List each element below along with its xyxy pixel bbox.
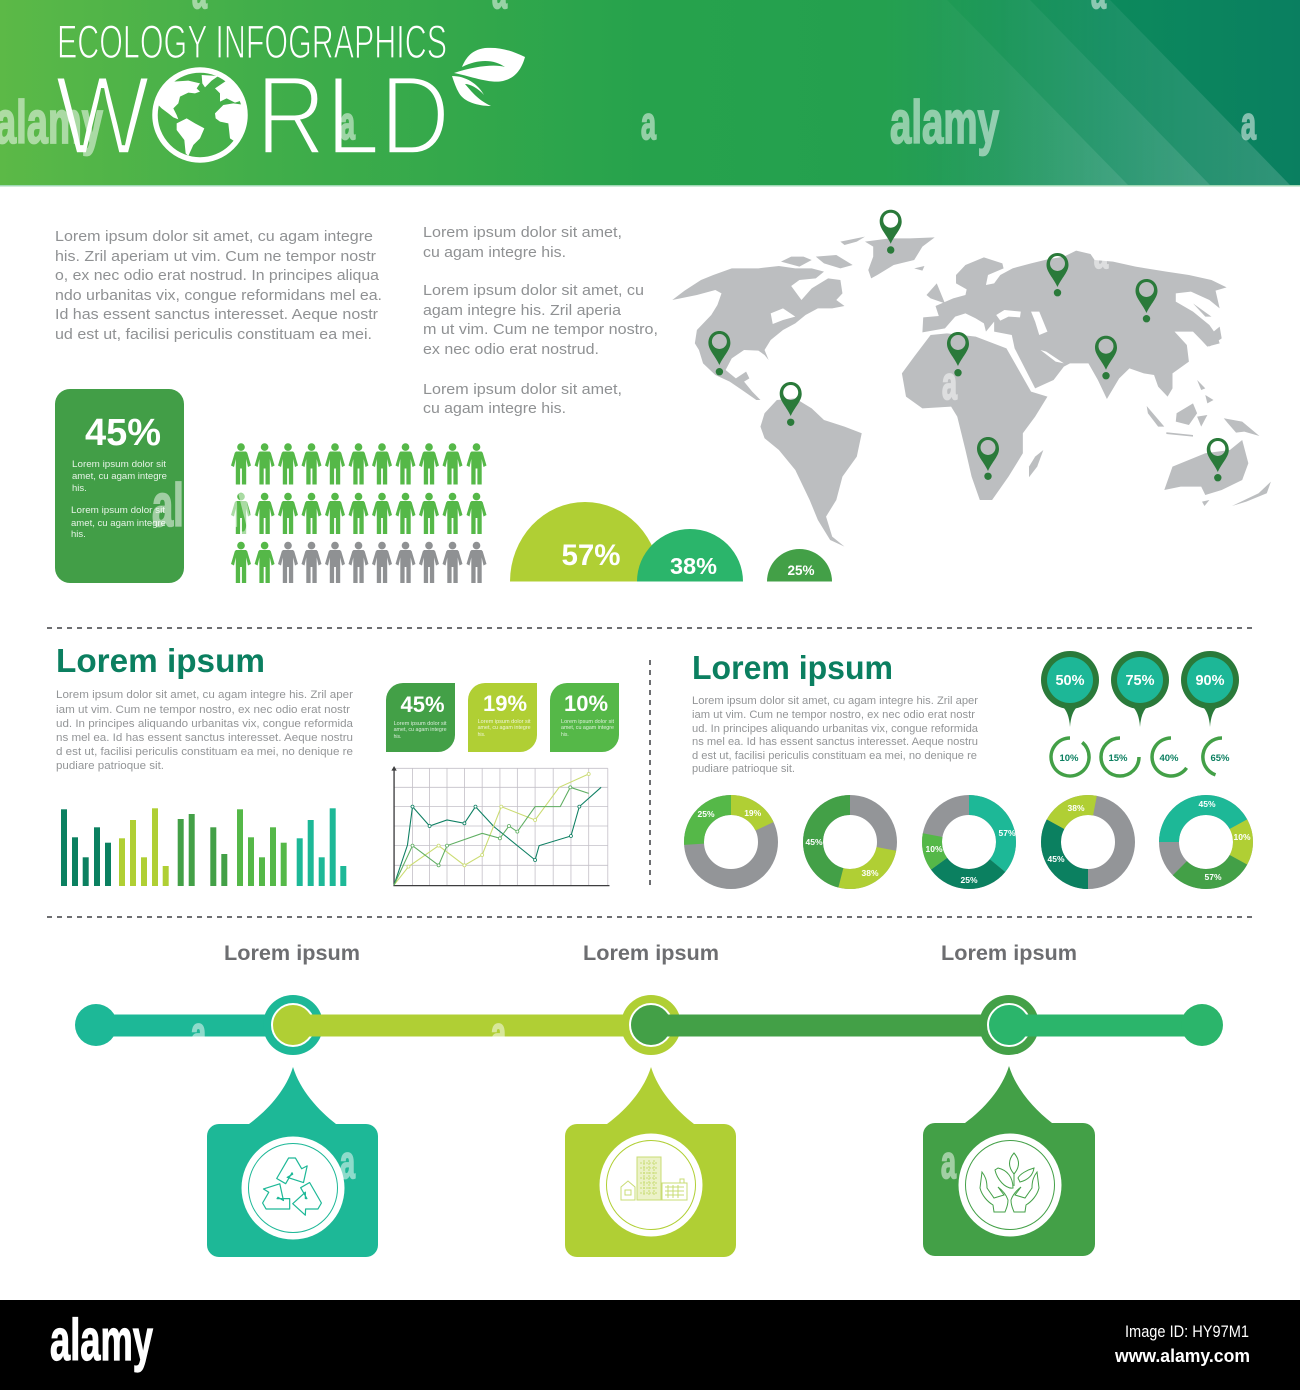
text block: intro left: Lorem ipsum dolor sit amet, cu agam integre bbox=[55, 229, 373, 245]
text block: paragraph right: pudiare patrioque sit. bbox=[692, 763, 795, 775]
stat tab 19%: his. bbox=[478, 732, 485, 738]
icon: hands and leaves bbox=[980, 1153, 1039, 1212]
icon: leaves bbox=[452, 48, 525, 106]
chart: people pictogram bbox=[231, 443, 486, 583]
icon: map pin north africa bbox=[947, 332, 969, 376]
panel: recycle card bbox=[207, 1067, 378, 1257]
footer bar: alamy bbox=[50, 1308, 153, 1373]
watermark overlays: a bbox=[641, 97, 656, 149]
donut chart 3 bbox=[925, 805, 1016, 885]
stat tab 19%: 19% bbox=[483, 691, 527, 716]
timeline heading 1: Lorem ipsum bbox=[224, 941, 360, 965]
semicircle 25%: 25% bbox=[787, 563, 815, 578]
semicircle 25% bbox=[767, 549, 832, 582]
panel: 45% stat card: Lorem ipsum dolor sit bbox=[71, 505, 165, 516]
text block: paragraph left: ns mel ea. Id has essent sanctus interesset. Aeque nostru bbox=[56, 732, 353, 744]
icon: buildings bbox=[621, 1157, 687, 1200]
panel: 45% stat card: his. bbox=[72, 483, 87, 494]
callout pin 50%: 50% bbox=[1055, 673, 1085, 689]
chart: line chart bbox=[391, 766, 609, 886]
donut chart 1: 19% bbox=[744, 808, 762, 818]
text block: intro left: ud est ut, facilisi periculis constituam ea mei. bbox=[55, 327, 372, 343]
stat tab 10%: 10% bbox=[564, 691, 608, 716]
text block: paragraph left: d est ut, facilisi periculis constituam ea mei, no denique re bbox=[56, 746, 353, 758]
text block: paragraph left: pudiare patrioque sit. bbox=[56, 760, 164, 772]
progress ring 65%: 65% bbox=[1210, 753, 1230, 764]
title: ecology infographics: ECOLOGY INFOGRAPHICS bbox=[57, 15, 447, 68]
icon: map pin greenland bbox=[880, 210, 902, 254]
semicircle 38% bbox=[637, 529, 743, 582]
icon: map pin russia bbox=[1046, 253, 1068, 296]
stat tab 10%: his. bbox=[561, 732, 569, 738]
text block: intro middle: Lorem ipsum dolor sit amet, bbox=[423, 225, 622, 241]
watermark overlays: a bbox=[340, 97, 355, 149]
icon: map pin east asia bbox=[1136, 279, 1158, 322]
donut chart 1: 25% bbox=[697, 809, 715, 819]
donut chart 4: 45% bbox=[1047, 854, 1065, 864]
semicircle 57% bbox=[510, 502, 660, 582]
watermark overlays: a bbox=[941, 1136, 956, 1188]
text block: intro left: ndo urbanitas vix, congue reformidans mel ea. bbox=[55, 288, 382, 304]
progress ring 40% bbox=[1152, 738, 1187, 776]
text block: intro middle: cu agam integre his. bbox=[423, 401, 566, 417]
text block: paragraph right: Lorem ipsum dolor sit amet, cu agam integre his. Zril aper bbox=[692, 695, 978, 707]
progress ring 10% bbox=[1051, 738, 1089, 776]
footer bar: www.alamy.com bbox=[1114, 1346, 1250, 1366]
panel: header banner bbox=[0, 0, 1300, 186]
panel: 45% stat card: his. bbox=[71, 529, 86, 540]
watermark overlays: a bbox=[191, 1007, 206, 1059]
text block: paragraph right: ud. In principes aliquando urbanitas vix, congue reformida bbox=[692, 723, 979, 735]
text block: intro middle: Lorem ipsum dolor sit amet, cu bbox=[423, 283, 644, 299]
progress ring 10%: 10% bbox=[1059, 753, 1079, 764]
icon: map pin mexico bbox=[708, 331, 730, 375]
text block: paragraph right bbox=[692, 695, 979, 775]
donut chart 3: 25% bbox=[960, 875, 978, 885]
callout pin 90% bbox=[1181, 651, 1239, 727]
timeline bbox=[75, 995, 1223, 1055]
donut chart 5: 10% bbox=[1233, 832, 1251, 842]
stat tab 45%: Lorem ipsum dolor sit bbox=[394, 721, 447, 727]
donut chart 1 bbox=[694, 805, 768, 879]
chart: bar chart bbox=[61, 808, 346, 886]
donut chart 5: 45% bbox=[1198, 799, 1216, 809]
text block: paragraph right: d est ut, facilisi periculis constituam ea mei, no denique re bbox=[692, 750, 977, 762]
text block: paragraph right: iam ut vim. Cum ne tempor nostro, ex nec odio erat nostr bbox=[692, 709, 975, 721]
text block: intro middle: m ut vim. Cum ne tempor nostro, bbox=[423, 322, 658, 338]
icon: recycle bbox=[257, 1158, 327, 1219]
donut chart 2: 45% bbox=[805, 837, 823, 847]
donut chart 5: 57% bbox=[1204, 872, 1222, 882]
panel: city card bbox=[565, 1067, 736, 1257]
icon: map pin south america bbox=[780, 382, 802, 426]
footer bar: Image ID: HY97M1 bbox=[1125, 1322, 1249, 1341]
icon: map pin australia bbox=[1207, 438, 1229, 481]
progress ring 40%: 40% bbox=[1159, 753, 1179, 764]
heading: lorem ipsum left: Lorem ipsum bbox=[56, 642, 265, 679]
text block: paragraph left bbox=[56, 689, 354, 772]
panel: 45% stat card: Lorem ipsum dolor sit bbox=[72, 459, 166, 470]
donut chart 3: 10% bbox=[925, 844, 943, 854]
panel: 45% stat card: amet, cu agam integre bbox=[71, 518, 166, 529]
text block: intro left: his. Zril aperiam ut vim. Cum ne tempor nostr bbox=[55, 249, 376, 265]
text block: intro middle bbox=[423, 225, 658, 417]
semicircle 57%: 57% bbox=[561, 539, 621, 572]
donut chart 2 bbox=[805, 805, 887, 879]
watermark overlays: alamy bbox=[0, 89, 103, 156]
progress ring 65% bbox=[1203, 738, 1230, 775]
chart: world map with pins bbox=[672, 210, 1271, 547]
donut chart 3: 57% bbox=[998, 828, 1016, 838]
donut chart 2: 38% bbox=[861, 868, 879, 878]
text block: paragraph left: iam ut vim. Cum ne tempor nostro, ex nec odio erat nostr bbox=[56, 704, 350, 716]
progress ring 15% bbox=[1101, 738, 1139, 776]
watermark overlays: alamy bbox=[890, 89, 999, 156]
icon: map pin india bbox=[1095, 336, 1117, 379]
text block: intro middle: ex nec odio erat nostrud. bbox=[423, 342, 599, 358]
callout pin 90%: 90% bbox=[1195, 673, 1225, 689]
icon: globe bbox=[155, 70, 247, 160]
icon: map pin southern africa bbox=[977, 437, 999, 480]
callout pin 75% bbox=[1111, 651, 1169, 727]
watermark overlays: a bbox=[1241, 97, 1256, 149]
title: world: W bbox=[55, 53, 150, 178]
stat tab 45%: amet, cu agam integre bbox=[394, 727, 447, 733]
text block: intro middle: Lorem ipsum dolor sit amet, bbox=[423, 382, 622, 398]
watermark overlays: a bbox=[340, 1136, 355, 1188]
watermark overlays: a bbox=[942, 357, 957, 409]
donut chart 4 bbox=[1047, 803, 1125, 879]
stat tab 45%: 45% bbox=[400, 692, 445, 717]
stat tab 10%: amet, cu agam integre bbox=[561, 725, 614, 731]
watermark overlays: a bbox=[491, 1007, 506, 1059]
text block: intro middle: cu agam integre his. bbox=[423, 245, 566, 261]
stat tab 19%: Lorem ipsum dolor sit bbox=[478, 719, 531, 725]
stat tab 45%: his. bbox=[394, 734, 401, 740]
stat tab 10%: Lorem ipsum dolor sit bbox=[561, 719, 615, 725]
footer bar bbox=[0, 1300, 1300, 1390]
text block: paragraph right: ns mel ea. Id has essent sanctus interesset. Aeque nostru bbox=[692, 736, 978, 748]
text block: intro left bbox=[55, 229, 382, 343]
timeline heading 3: Lorem ipsum bbox=[941, 941, 1077, 965]
heading: lorem ipsum right: Lorem ipsum bbox=[692, 649, 893, 686]
panel: 45% stat card: amet, cu agam integre bbox=[72, 471, 167, 482]
text block: intro left: Id has essent sanctus interesset. Aeque nostr bbox=[55, 307, 378, 323]
title: world: RLD bbox=[256, 53, 450, 178]
stat tab 10% bbox=[550, 683, 619, 752]
callout pin 75%: 75% bbox=[1125, 673, 1155, 689]
panel: 45% stat card bbox=[55, 389, 184, 583]
text block: paragraph left: Lorem ipsum dolor sit amet, cu agam integre his. Zril aper bbox=[56, 689, 353, 701]
stat tab 19%: amet, cu agam integre bbox=[478, 725, 531, 731]
callout pin 50% bbox=[1041, 651, 1099, 727]
text block: intro left: o, ex nec odio erat nostrud. In principes aliqua bbox=[55, 268, 380, 284]
watermark overlays: alamy bbox=[152, 472, 260, 539]
watermark overlays: a bbox=[1094, 235, 1109, 276]
chart: semicircle percentages bbox=[510, 502, 832, 582]
panel: hands card bbox=[923, 1066, 1095, 1256]
progress ring 15%: 15% bbox=[1108, 753, 1128, 764]
title: world bbox=[55, 53, 450, 178]
text block: intro middle: agam integre his. Zril aperia bbox=[423, 303, 622, 319]
donut chart 5 bbox=[1169, 799, 1251, 882]
panel: 45% stat card: 45% bbox=[85, 412, 161, 454]
stat tab 19% bbox=[468, 683, 537, 752]
timeline heading 2: Lorem ipsum bbox=[583, 941, 719, 965]
stat tab 45% bbox=[386, 683, 455, 752]
donut chart 4: 38% bbox=[1067, 803, 1085, 813]
semicircle 38%: 38% bbox=[670, 553, 717, 579]
text block: paragraph left: ud. In principes aliquando urbanitas vix, congue reformida bbox=[56, 718, 354, 730]
